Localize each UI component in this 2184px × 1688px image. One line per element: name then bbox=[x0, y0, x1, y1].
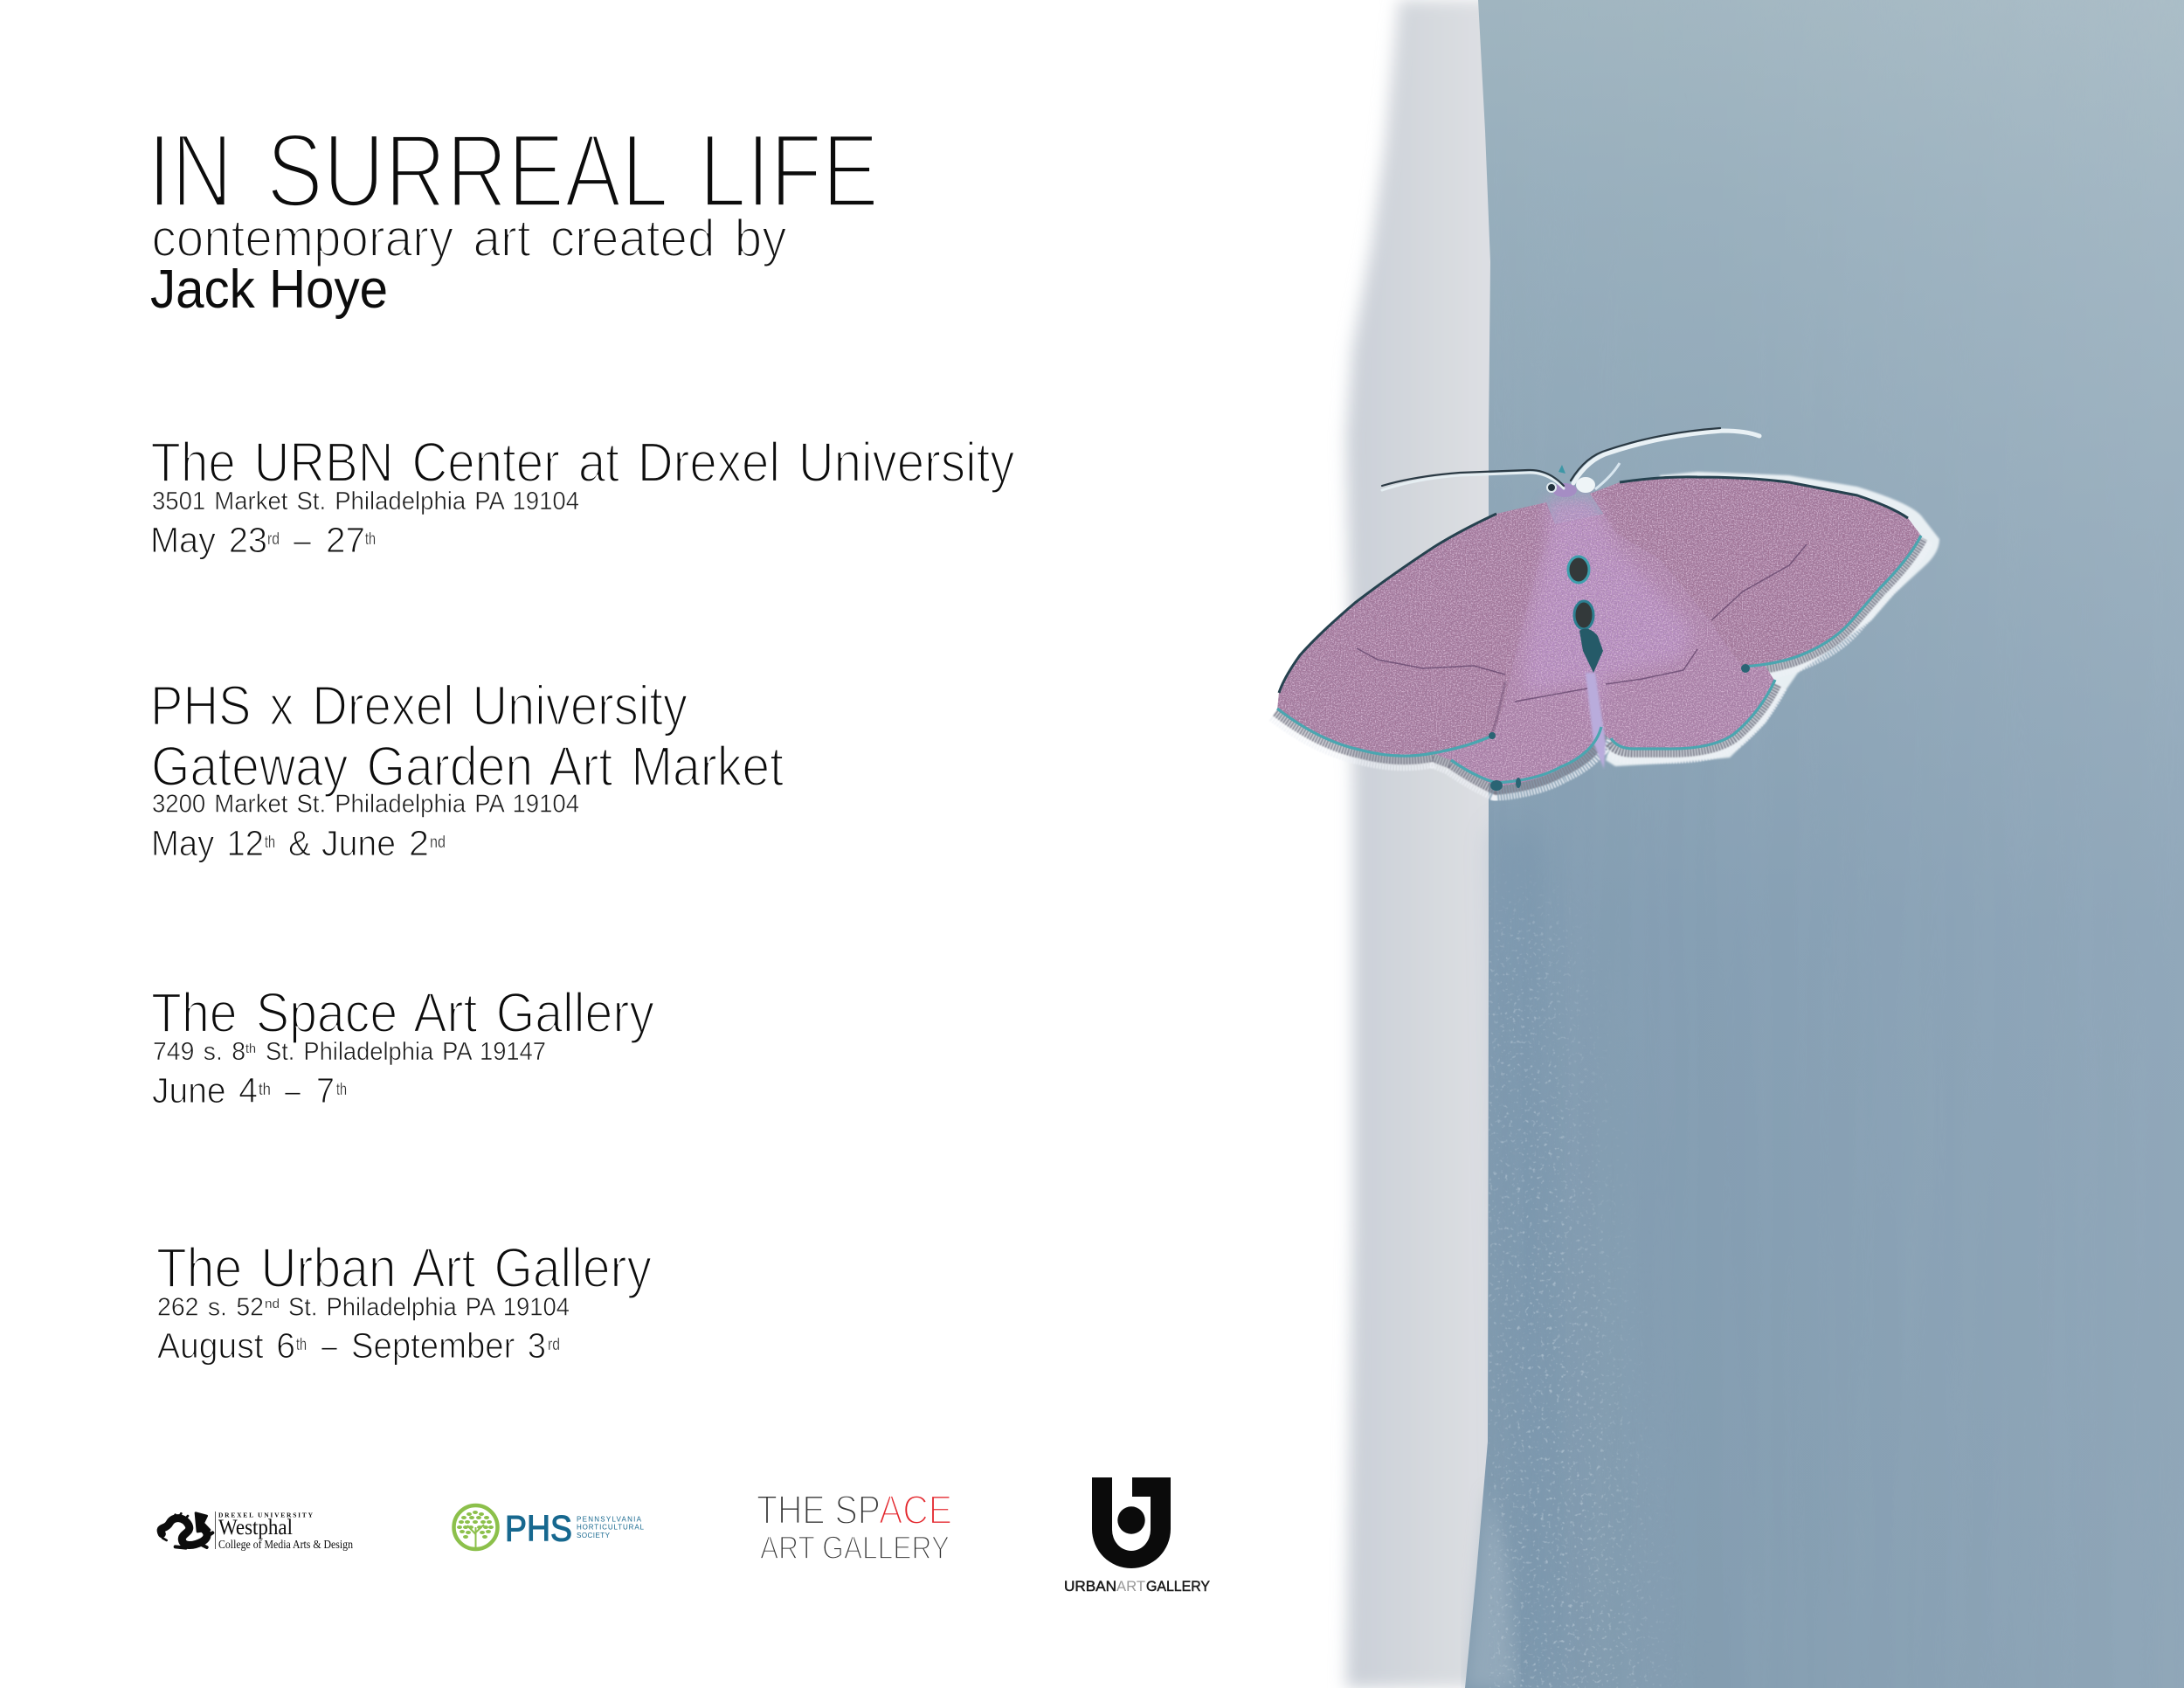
moth bbox=[1277, 428, 1939, 791]
dark hind wing tips bbox=[1489, 664, 1750, 791]
venue: The Space Art Gallery: 7 bbox=[316, 1070, 335, 1110]
icon: dragon bbox=[161, 1513, 212, 1548]
logo: Urban Art Gallery: GALLERY bbox=[1146, 1578, 1210, 1595]
soft grey wall band bbox=[1346, 0, 1538, 1688]
venue: The Urban Art Gallery: rd bbox=[548, 1336, 560, 1354]
venue: PHS x Drexel: PHS x Drexel University bbox=[150, 675, 688, 737]
venue: The Urban Art Gallery: 262 s. 52 bbox=[157, 1293, 264, 1321]
venue: The Space Art Gallery: 749 s. 8 bbox=[153, 1038, 245, 1066]
logo: Urban Art Gallery: URBAN bbox=[1064, 1578, 1116, 1595]
logo: Drexel Westphal: College of Media Arts & Design bbox=[218, 1538, 353, 1551]
venue: URBN Center: th bbox=[365, 530, 376, 549]
icon: U mark bbox=[1092, 1477, 1171, 1568]
logo: Drexel Westphal bbox=[161, 1512, 353, 1551]
venue: URBN Center: – bbox=[294, 520, 311, 560]
venue: PHS x Drexel: 2 bbox=[409, 823, 429, 863]
venue: The Space Art Gallery: – bbox=[285, 1070, 301, 1110]
venue: The Urban Art Gallery bbox=[156, 1236, 652, 1366]
right fore wing bbox=[1590, 477, 1921, 667]
venue: URBN Center: The URBN Center at Drexel University bbox=[150, 431, 1015, 494]
head bbox=[1547, 463, 1620, 497]
logo: The Space Art Gallery: THE SP bbox=[757, 1487, 881, 1532]
logo: PHS: SOCIETY bbox=[577, 1532, 611, 1539]
venue: The Urban Art Gallery: September 3 bbox=[351, 1325, 546, 1366]
venue: URBN Center: May 23 bbox=[150, 520, 267, 560]
venue: The Urban Art Gallery: The Urban Art Gallery bbox=[156, 1236, 652, 1299]
venue: The Urban Art Gallery: St. Philadelphia PA 19104 bbox=[288, 1293, 570, 1321]
teal wing edges bbox=[1277, 536, 1921, 783]
logo: Drexel Westphal: Westphal bbox=[218, 1516, 293, 1539]
venue: URBN Center: rd bbox=[267, 530, 280, 549]
wing veins bbox=[1357, 544, 1807, 734]
body spots bbox=[1568, 557, 1603, 673]
venue: PHS x Drexel: Gateway Garden Art Market bbox=[151, 735, 784, 798]
venue: PHS x Drexel: th bbox=[265, 834, 275, 852]
left fore wing bbox=[1277, 502, 1555, 756]
background bbox=[1338, 0, 2184, 1688]
venue: The Urban Art Gallery: th bbox=[296, 1336, 307, 1354]
dark wing leading edges bbox=[1279, 477, 1908, 693]
abdomen bbox=[1586, 673, 1606, 769]
white shadow rim bbox=[1606, 472, 1939, 766]
venue: The Space Art Gallery: The Space Art Gallery bbox=[151, 981, 654, 1044]
logo: Urban Art Gallery: ART bbox=[1116, 1578, 1145, 1595]
venue: PHS x Drexel: & bbox=[288, 823, 311, 863]
venue: The Urban Art Gallery: – bbox=[321, 1325, 337, 1366]
logo: PHS bbox=[454, 1505, 645, 1549]
logo: Urban Art Gallery bbox=[1064, 1477, 1210, 1595]
subtitle: contemporary art created by bbox=[152, 209, 786, 267]
logo: The Space Art Gallery bbox=[757, 1487, 952, 1566]
venue: PHS x Drexel: nd bbox=[430, 834, 446, 852]
logo: PHS: HORTICULTURAL bbox=[577, 1524, 645, 1532]
lilac body bbox=[1524, 498, 1693, 725]
fringe hairs bbox=[1277, 537, 1921, 788]
artist name: Jack Hoye bbox=[150, 259, 388, 320]
logo: The Space Art Gallery: ART GALLERY bbox=[760, 1530, 950, 1566]
venue: The Space Art Gallery: June 4 bbox=[152, 1070, 258, 1110]
antennae bbox=[1382, 428, 1759, 490]
blue-grey wall panel bbox=[1465, 0, 2184, 1688]
venue: The Space Art Gallery: th bbox=[245, 1041, 256, 1056]
icon: tree ring bbox=[454, 1505, 498, 1549]
venue: PHS x Drexel: May 12 bbox=[151, 823, 264, 863]
title: IN SURREAL LIFE bbox=[148, 112, 879, 229]
venue: The Space Art Gallery: th bbox=[336, 1081, 347, 1099]
logo: PHS: PENNSYLVANIA bbox=[577, 1516, 642, 1524]
logo: The Space Art Gallery: ACE bbox=[879, 1487, 952, 1532]
venue: The Urban Art Gallery: August 6 bbox=[157, 1325, 295, 1366]
logo: Drexel Westphal: DREXEL UNIVERSITY bbox=[218, 1512, 314, 1519]
venue: URBN Center bbox=[150, 431, 1015, 560]
venue: The Space Art Gallery: St. Philadelphia PA 19147 bbox=[266, 1038, 546, 1066]
venue: PHS x Drexel: June bbox=[321, 823, 396, 863]
wings bbox=[1277, 477, 1921, 786]
venue: PHS x Drexel: 3200 Market St. Philadelphia PA 19104 bbox=[152, 790, 579, 818]
venue: The Space Art Gallery bbox=[151, 981, 654, 1110]
venue: URBN Center: 27 bbox=[326, 520, 365, 560]
venue: PHS x Drexel bbox=[150, 675, 784, 863]
venue: The Urban Art Gallery: nd bbox=[265, 1297, 280, 1311]
venue: URBN Center: 3501 Market St. Philadelphia PA 19104 bbox=[152, 488, 579, 515]
hind wings bbox=[1433, 511, 1775, 786]
logo: PHS: PHS bbox=[505, 1508, 572, 1548]
venue: The Space Art Gallery: th bbox=[259, 1081, 271, 1099]
